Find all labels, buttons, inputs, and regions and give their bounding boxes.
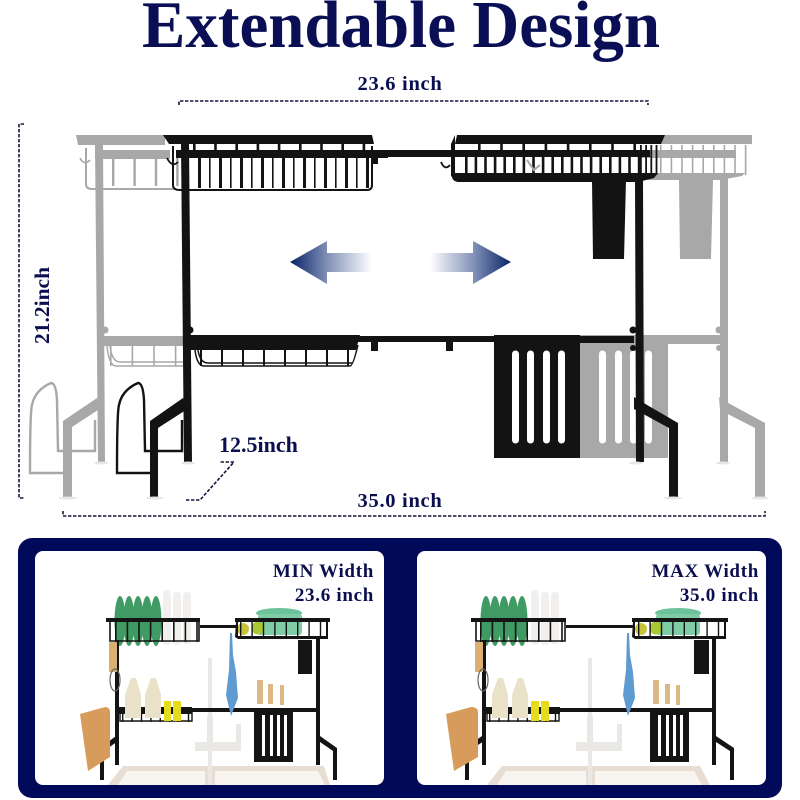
bottles: [125, 678, 161, 718]
top right basket: [441, 135, 665, 182]
towel: [226, 633, 238, 716]
max width label: 35.0 inch: [680, 585, 759, 606]
sink: [487, 766, 710, 785]
max width label: MAX Width: [652, 561, 759, 582]
arrow: right: [430, 241, 511, 284]
right front leg: [634, 397, 678, 497]
dimension: top width 23.6 inch: 23.6 inch: [358, 73, 442, 95]
grey posts and arms: [63, 144, 765, 497]
sink: [108, 766, 330, 785]
rear post right: [635, 176, 644, 462]
top connecting bar: [372, 150, 454, 157]
top left basket: [163, 135, 388, 190]
dimension: bottom width 35.0 inch: 35.0 inch: [358, 490, 442, 512]
dimension: depth 12.5inch: [186, 432, 298, 500]
plate holder: [117, 383, 182, 473]
dimension: bottom width 35.0 inch: [63, 490, 765, 516]
feet shadows: [59, 462, 769, 500]
utensils: [109, 642, 120, 691]
white plates: [531, 590, 559, 645]
min panel card: [35, 551, 384, 785]
grey plate holder: [30, 383, 95, 473]
grey lower shelf: [103, 336, 190, 366]
grey knife holder: [679, 180, 713, 259]
lower connecting bar: [186, 326, 636, 351]
green plates: [114, 596, 162, 646]
min width label: [273, 561, 374, 606]
pot and fruit: [237, 608, 302, 635]
knife holder: [592, 180, 626, 259]
panel: max width: [417, 551, 766, 785]
lower left basket: [190, 335, 360, 366]
minimum rack in black: [117, 135, 678, 497]
min width label: MIN Width: [273, 561, 374, 582]
max panel card: [417, 551, 766, 785]
grey top right shelf: [640, 135, 752, 180]
knives: [257, 680, 284, 705]
sponges: [531, 701, 549, 721]
towel: [623, 633, 635, 716]
min width label: 23.6 inch: [295, 585, 374, 606]
dimension: depth 12.5inch: 12.5inch: [219, 432, 298, 457]
knives: [653, 680, 680, 705]
grey utensil board: [580, 335, 668, 458]
cutting board: [80, 707, 110, 771]
faucet: [576, 658, 622, 785]
grey top left shelf: [76, 135, 180, 189]
knife holder: [298, 640, 312, 674]
white plates: [163, 590, 191, 645]
faucet: [195, 658, 241, 785]
rack frame: [100, 618, 337, 780]
pot and fruit: [635, 608, 701, 635]
bottles: [492, 678, 528, 718]
rack frame: [465, 618, 734, 780]
panel: min width: [35, 551, 384, 785]
cutting board: [446, 707, 478, 771]
dimension: top width 23.6 inch: [179, 73, 648, 105]
left front leg: [150, 398, 189, 497]
rear post left: [181, 144, 192, 462]
green plates: [480, 596, 528, 646]
utensil board: [254, 708, 293, 762]
arrow: left: [290, 241, 372, 284]
utensil board: [650, 708, 689, 762]
bottom navy panel: [18, 538, 782, 798]
max width label: [652, 561, 759, 606]
extended rack in grey: [30, 135, 765, 497]
utensil board: [494, 335, 580, 458]
knife holder: [694, 640, 709, 674]
utensils: [475, 642, 488, 691]
dimension: height 21.2inch: 21.2inch: [30, 267, 54, 344]
sponges: [164, 701, 181, 721]
dimension: height 21.2inch: [19, 124, 54, 498]
